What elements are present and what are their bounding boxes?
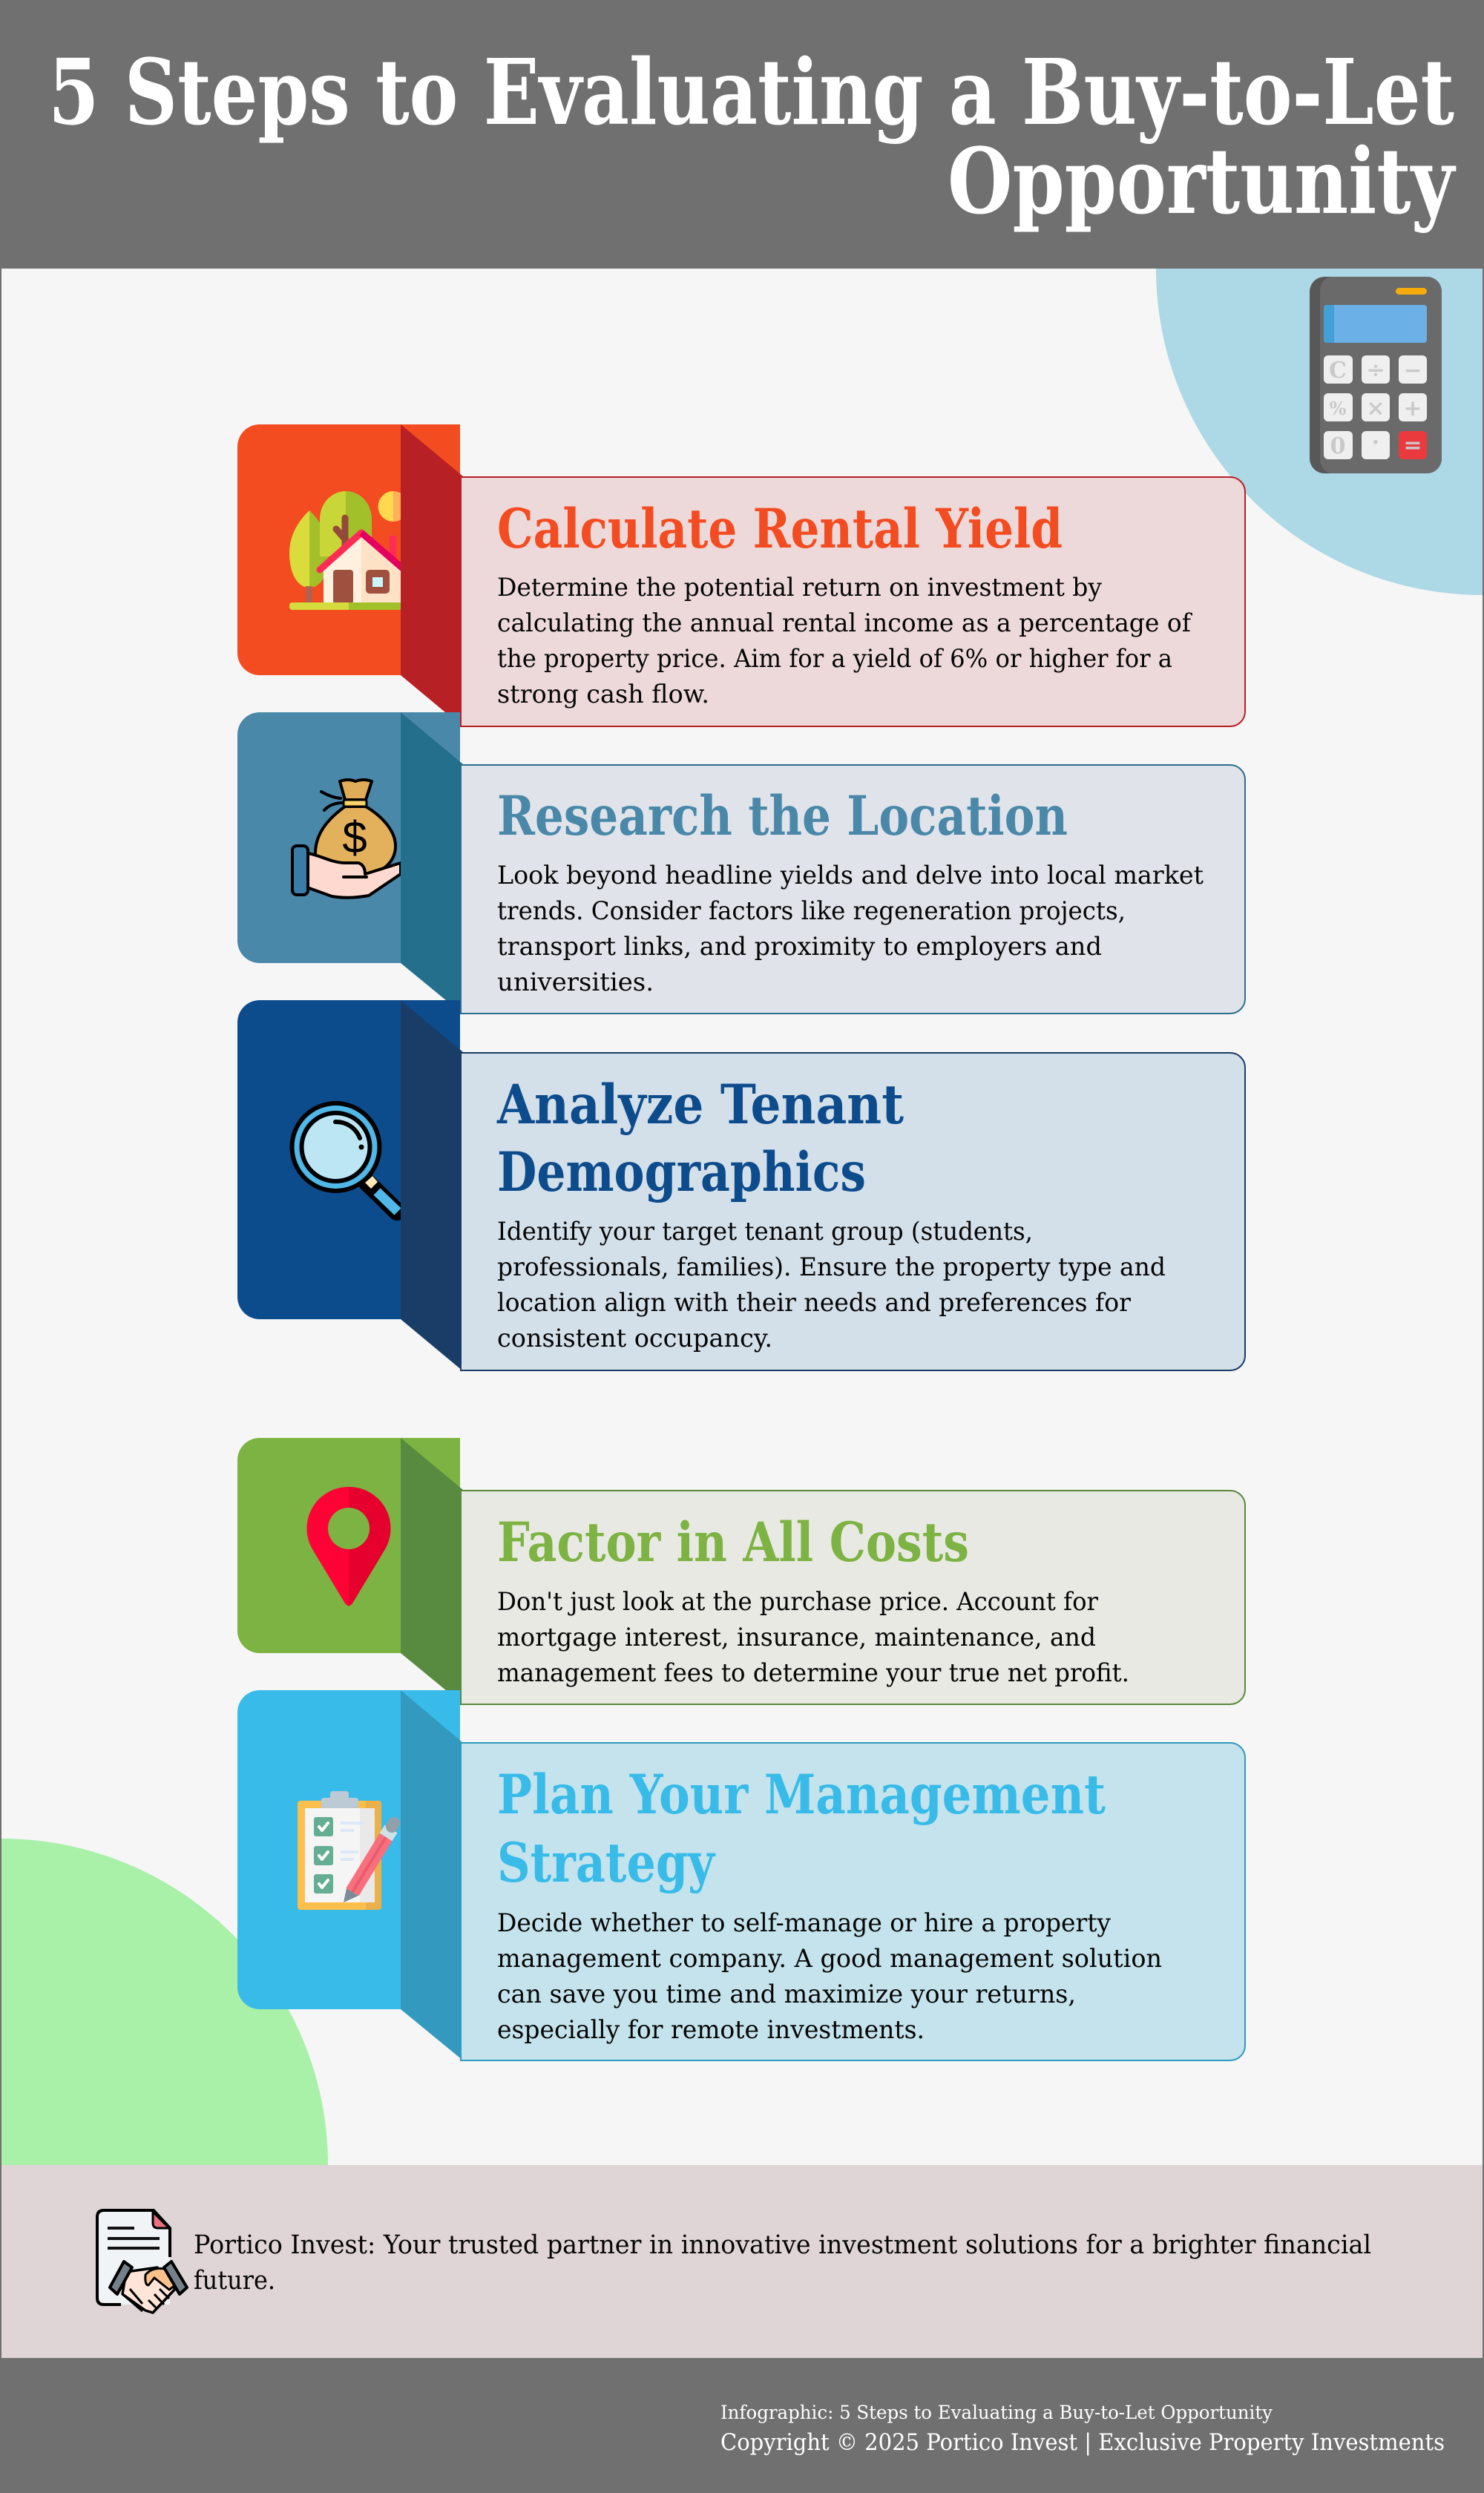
step 3 body: Identify your target tenant group (students, xyxy=(497,1217,1033,1246)
step 4: factor in all costs xyxy=(237,1438,1245,1704)
step 2 body: universities. xyxy=(497,968,654,997)
step 3 body: professionals, families). Ensure the property type and xyxy=(497,1252,1166,1282)
step 1 body: calculating the annual rental income as a percentage of xyxy=(497,608,1192,638)
step 3 heading: Demographics xyxy=(497,1140,866,1204)
step 4 heading: Factor in All Costs xyxy=(497,1511,969,1574)
step 4 body: Don't just look at the purchase price. Account for xyxy=(497,1587,1099,1617)
step 5 fold xyxy=(401,1690,463,2060)
step 4 tab xyxy=(237,1438,460,1653)
company banner xyxy=(1,2165,1483,2358)
banner text xyxy=(194,2230,1371,2296)
step 5: plan your management strategy xyxy=(237,1690,1245,2060)
icon: calculator: × xyxy=(1366,395,1385,421)
banner text: Portico Invest: Your trusted partner in innovative investment solutions for a brighter financial xyxy=(194,2230,1371,2260)
step 3 heading: Analyze Tenant xyxy=(496,1073,904,1137)
icon: calculator: = xyxy=(1403,433,1422,459)
icon: calculator: % xyxy=(1330,398,1347,419)
step 1 tab xyxy=(237,424,460,675)
step 2 body: Look beyond headline yields and delve into local market xyxy=(497,861,1204,890)
footer: Infographic: 5 Steps to Evaluating a Buy-to-Let Opportunity xyxy=(720,2402,1273,2423)
step 2 heading: Research the Location xyxy=(497,784,1068,848)
step 5 heading xyxy=(497,1763,1106,1895)
step 2: research the location xyxy=(237,712,1245,1014)
step 4 body xyxy=(497,1587,1129,1688)
step 4 card xyxy=(461,1491,1245,1704)
decorative green quarter circle xyxy=(1,1839,328,2165)
step 5 body: management company. A good management solution xyxy=(497,1944,1162,1974)
step 1 heading: Calculate Rental Yield xyxy=(497,497,1063,561)
footer: Copyright © 2025 Portico Invest | Exclusive Property Investments xyxy=(720,2429,1445,2456)
step 1 body: the property price. Aim for a yield of 6% or higher for a xyxy=(497,644,1172,674)
step 2 body: trends. Consider factors like regeneration projects, xyxy=(497,896,1126,926)
step 1: calculate rental yield xyxy=(237,424,1245,727)
step 3 body xyxy=(497,1217,1166,1353)
icon: map pin xyxy=(306,1487,391,1606)
step 3 fold xyxy=(401,1000,463,1371)
icon: money bag in hand xyxy=(292,780,401,898)
step 1 fold xyxy=(401,424,463,727)
step 3 tab xyxy=(237,1000,460,1319)
header title xyxy=(48,39,1457,234)
step 1 body xyxy=(497,573,1192,709)
icon: calculator: + xyxy=(1403,395,1422,421)
step 5 body xyxy=(497,1908,1162,2045)
icon: calculator: 0 xyxy=(1330,433,1345,459)
banner text: future. xyxy=(194,2266,275,2296)
step 5 tab xyxy=(237,1690,460,2009)
step 4 fold xyxy=(401,1438,463,1704)
step 3 body: consistent occupancy. xyxy=(497,1324,772,1353)
icon: contract and handshake xyxy=(97,2210,187,2313)
step 2 body xyxy=(497,861,1204,997)
icon: money bag in hand: $ xyxy=(342,812,367,862)
step 4 body: mortgage interest, insurance, maintenance, and xyxy=(497,1623,1096,1652)
footer xyxy=(720,2402,1445,2456)
step 3 body: location align with their needs and preferences for xyxy=(497,1288,1132,1318)
step 5 heading: Plan Your Management xyxy=(497,1763,1106,1827)
decorative blue quarter circle xyxy=(1156,269,1483,595)
step 2 card xyxy=(461,765,1245,1014)
step 2 body: transport links, and proximity to employers and xyxy=(497,932,1102,962)
step 5 heading: Strategy xyxy=(497,1831,716,1895)
step 5 body: Decide whether to self-manage or hire a property xyxy=(497,1908,1112,1938)
icon: calculator: − xyxy=(1403,358,1422,384)
step 4 body: management fees to determine your true net profit. xyxy=(497,1658,1129,1688)
icon: magnifying glass xyxy=(289,1101,398,1212)
step 3 heading xyxy=(496,1073,904,1204)
icon: calculator: C xyxy=(1329,358,1347,384)
step 1 card xyxy=(461,477,1245,726)
icon: calculator: ÷ xyxy=(1366,358,1385,384)
step 3: analyze tenant demographics xyxy=(237,1000,1245,1371)
step 2 fold xyxy=(401,712,463,1014)
step 5 body: can save you time and maximize your returns, xyxy=(497,1980,1076,2009)
icon: calculator: · xyxy=(1372,430,1379,456)
step 1 body: Determine the potential return on investment by xyxy=(497,573,1103,602)
icon: house with trees xyxy=(289,491,408,610)
icon: clipboard and pencil xyxy=(298,1791,394,1910)
step 5 card xyxy=(461,1743,1245,2060)
step 3 card xyxy=(461,1053,1245,1370)
icon: calculator xyxy=(1310,277,1442,473)
step 5 body: especially for remote investments. xyxy=(497,2015,925,2045)
main background xyxy=(1,269,1483,2165)
step 2 tab xyxy=(237,712,460,963)
step 1 body: strong cash flow. xyxy=(497,680,709,709)
